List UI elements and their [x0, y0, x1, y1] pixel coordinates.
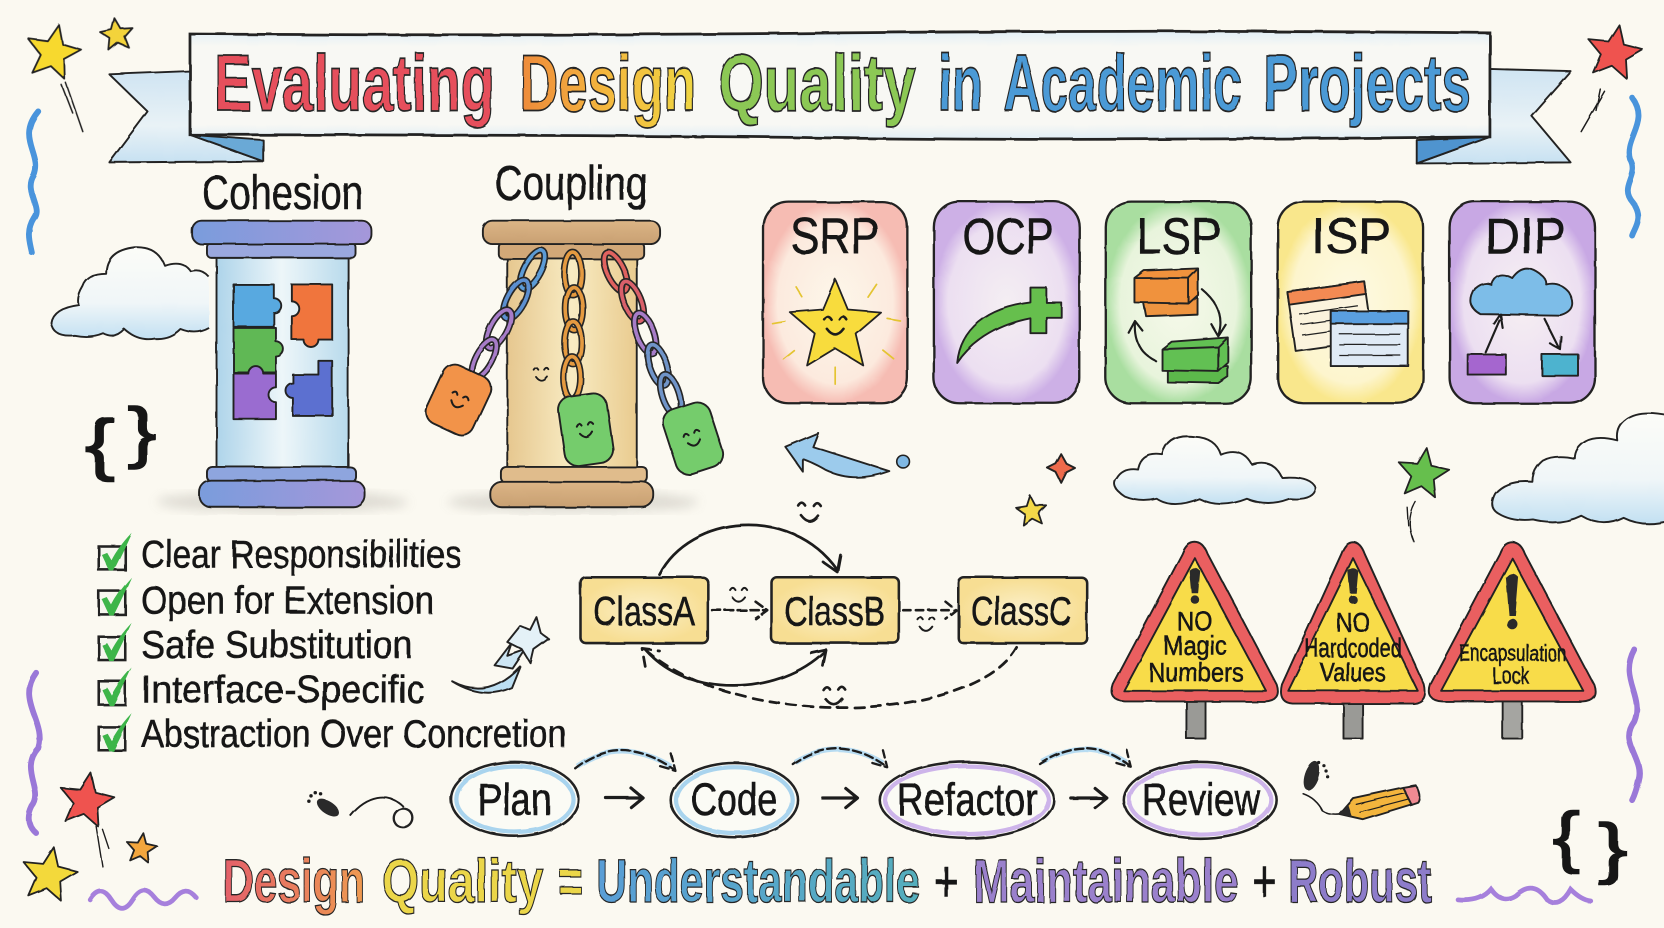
card: DIP	[1450, 202, 1595, 403]
warning sign: no magic numbers	[1112, 542, 1278, 739]
braces: left	[85, 395, 157, 482]
step: Refactor	[880, 762, 1054, 838]
banner left tail	[109, 71, 263, 162]
item: interface-specific: Interface-Specific	[141, 667, 425, 711]
exclamation mark	[1348, 568, 1358, 604]
title text	[214, 38, 1471, 127]
tag: green middle	[557, 392, 615, 468]
warning sign: no magic numbers: Magic	[1163, 631, 1227, 661]
title text: Academic	[1004, 38, 1242, 127]
tag: orange	[422, 360, 495, 440]
card: LSP: LSP	[1137, 208, 1221, 265]
card: LSP	[1106, 202, 1251, 403]
title text: in	[938, 38, 983, 127]
step: Code: Code	[691, 774, 778, 825]
formula: Robust	[1288, 847, 1432, 916]
title banner	[109, 31, 1571, 163]
faces	[730, 503, 935, 705]
item: open for extension: Open for Extension	[141, 578, 434, 622]
formula: +	[1252, 847, 1277, 916]
arrow: Refactor to Review	[1071, 788, 1107, 808]
braces: bottom-right: {	[1553, 800, 1580, 875]
dashed arc: Code to Refactor	[793, 749, 887, 767]
arrow: C dashed back to A	[642, 647, 1017, 708]
arrow: A dashed to B	[712, 602, 767, 619]
braces: bottom-right: }	[1598, 811, 1628, 886]
formula: =	[558, 847, 583, 916]
banner left fold	[190, 135, 263, 161]
box: ClassC: ClassC	[971, 588, 1072, 634]
arrow: blue swoosh to cards	[785, 433, 909, 477]
box: ClassB: ClassB	[784, 588, 885, 634]
squiggle: blue left	[29, 111, 38, 253]
braces: bottom-right	[1553, 800, 1628, 886]
icon: interface windows	[1287, 281, 1408, 366]
formula: Quality	[382, 847, 543, 916]
box: ClassC	[958, 577, 1087, 643]
banner ribbon	[190, 31, 1490, 139]
braces: left: }	[127, 395, 157, 470]
icon: substitutable blocks	[1129, 268, 1228, 383]
step: Plan	[451, 762, 578, 836]
squiggle: purple left	[29, 673, 40, 833]
item: safe substitution: Safe Substitution	[141, 623, 413, 667]
pillar shaft	[217, 257, 348, 469]
squiggle: bottom-left	[90, 891, 195, 908]
card: SRP	[763, 202, 907, 403]
card: ISP	[1278, 202, 1423, 403]
puzzle pieces	[233, 284, 332, 419]
class diagram	[581, 503, 1087, 708]
process flow	[309, 749, 1419, 838]
pillar shaft	[507, 258, 637, 468]
card: DIP: DIP	[1485, 208, 1566, 265]
decoration: top-right star	[1581, 20, 1646, 132]
formula: Understandable	[596, 847, 920, 916]
decoration: bottom-left stars	[18, 768, 158, 903]
cloud: left	[51, 247, 209, 339]
dashed arc: Refactor to Review	[1040, 749, 1131, 767]
box: ClassA: ClassA	[593, 588, 695, 634]
step: Code	[671, 763, 798, 837]
title text: Evaluating	[214, 38, 495, 127]
warning sign: encapsulation lock	[1429, 542, 1595, 739]
arrow: B dashed to C	[903, 602, 956, 619]
arrow: A under to B	[645, 649, 826, 686]
exclamation mark	[1506, 574, 1519, 629]
item: clear responsibilities: Clear Responsibilities	[141, 533, 462, 577]
coupling pillar	[422, 221, 727, 513]
step: Plan: Plan	[478, 774, 552, 825]
card: ISP: ISP	[1312, 208, 1391, 265]
cohesion pillar	[157, 221, 408, 513]
card: SRP: SRP	[791, 208, 880, 265]
decoration: top-left stars	[22, 16, 135, 132]
title text: Quality	[718, 38, 916, 127]
formula	[223, 847, 1432, 916]
cloud: middle	[1114, 436, 1316, 504]
warning sign: encapsulation lock: Lock	[1492, 662, 1529, 688]
cloud: right	[1492, 413, 1664, 524]
doodle: left footprint	[309, 793, 413, 828]
dashed arc: Plan to Code	[575, 751, 675, 770]
arrow: Plan to Code	[606, 788, 643, 808]
title text: Design	[520, 38, 696, 127]
icon: smiling star	[773, 279, 900, 384]
tag: green right	[659, 398, 727, 478]
banner right tail	[1417, 69, 1571, 163]
warning sign: no magic numbers: Numbers	[1148, 657, 1244, 687]
heading: Cohesion: Cohesion	[202, 167, 363, 220]
step: Review	[1124, 762, 1277, 838]
warning sign: no hardcoded values: Values	[1320, 657, 1386, 687]
arrow: Code to Refactor	[822, 788, 857, 808]
squiggle: purple right	[1629, 649, 1640, 800]
icon: green extension arrow	[957, 288, 1061, 363]
heading: Coupling: Coupling	[495, 158, 647, 211]
banner right fold	[1417, 137, 1490, 163]
decoration: small stars	[1015, 445, 1452, 541]
braces: left: {	[85, 407, 115, 482]
warning sign: no hardcoded values: Hardcoded	[1304, 633, 1402, 663]
step: Refactor: Refactor	[897, 774, 1038, 825]
warning sign: encapsulation lock: Encapsulation	[1459, 640, 1566, 666]
formula: Design	[223, 847, 365, 916]
checklist	[99, 533, 567, 756]
exclamation mark	[1190, 568, 1200, 604]
box: ClassB	[772, 577, 899, 643]
card: OCP: OCP	[963, 208, 1054, 265]
warning sign: no magic numbers: NO	[1177, 606, 1213, 636]
doodle: footprint and pencil	[1301, 759, 1419, 819]
formula: +	[934, 847, 958, 916]
icon: abstraction cloud with modules	[1468, 269, 1578, 376]
doodle: star swoosh	[452, 618, 549, 693]
warning sign: no hardcoded values	[1281, 542, 1425, 739]
chains	[466, 247, 685, 418]
item: abstraction over concretion: Abstraction Over Concretion	[141, 712, 567, 756]
squiggle: bottom-right	[1458, 888, 1591, 902]
card: OCP	[934, 202, 1079, 403]
box: ClassA	[581, 577, 708, 643]
formula: Maintainable	[973, 847, 1238, 916]
warning sign: no hardcoded values: NO	[1336, 607, 1370, 637]
title text: Projects	[1263, 38, 1471, 127]
step: Review: Review	[1142, 774, 1262, 825]
squiggle: blue right	[1627, 98, 1639, 236]
arrow: A over to B	[659, 525, 840, 574]
